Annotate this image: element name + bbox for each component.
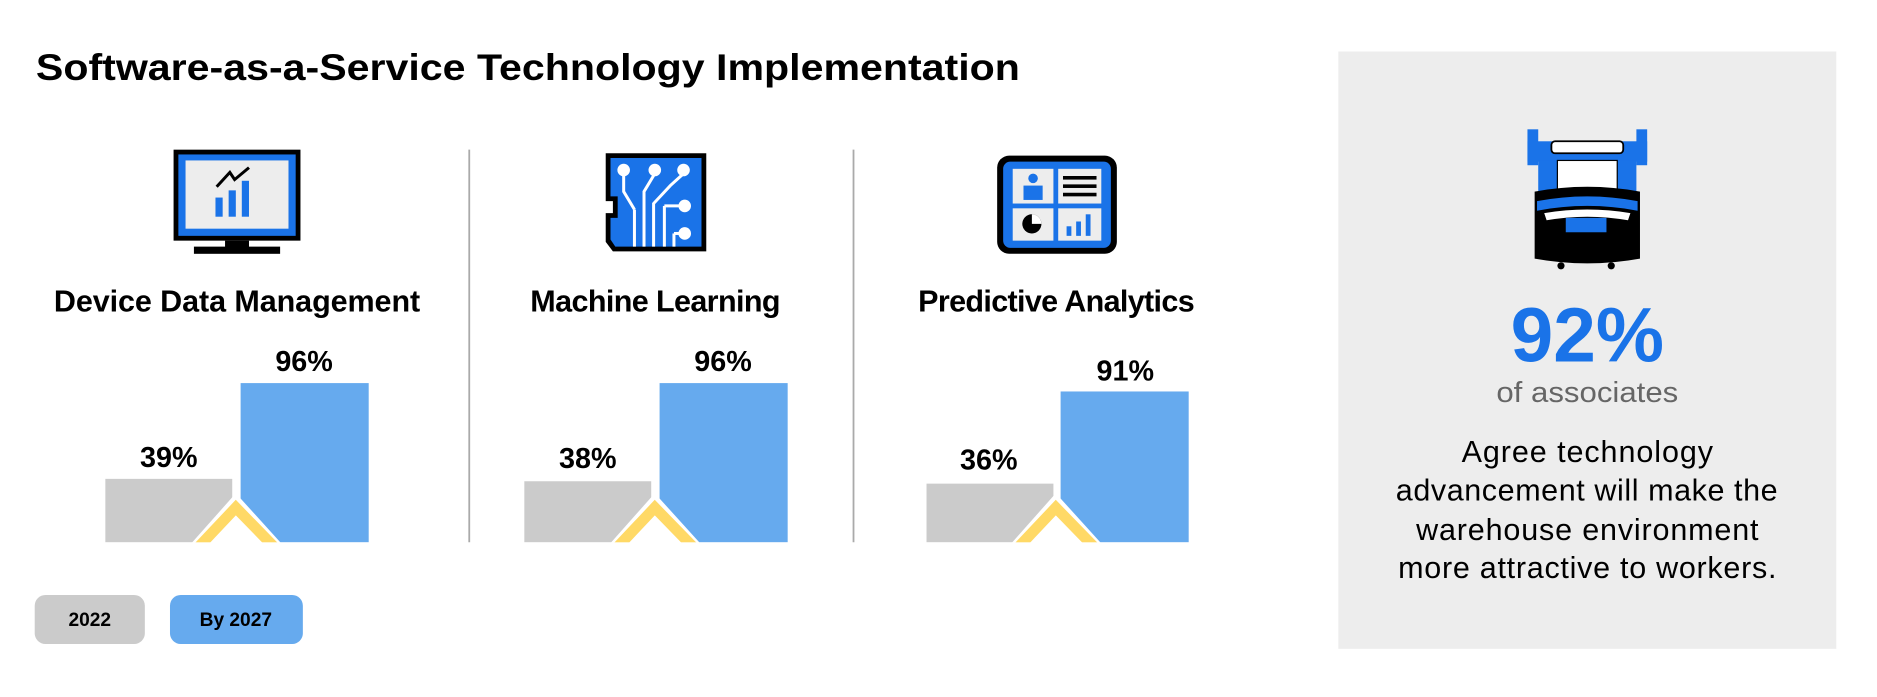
icon: machine learning chip <box>606 153 706 251</box>
panel: associates stat: warehouse environment <box>1415 513 1759 547</box>
labels <box>54 284 1195 318</box>
icon: monitor <box>174 150 300 254</box>
panel: associates stat: of associates <box>1496 377 1678 409</box>
icon: robot <box>1527 129 1647 269</box>
labels: Device Data Management <box>54 284 420 318</box>
icon: dashboard <box>997 156 1117 254</box>
panel: associates stat: Agree technology <box>1462 435 1714 469</box>
labels: Predictive Analytics <box>918 284 1195 318</box>
panel: associates stat: advancement will make the <box>1396 473 1778 507</box>
bar chart: predictive analytics: 91% <box>1097 356 1154 388</box>
legend <box>35 595 303 644</box>
legend: By 2027 <box>200 610 272 631</box>
legend: 2022 <box>68 610 111 631</box>
panel: associates stat: more attractive to workers. <box>1398 551 1776 585</box>
panel: associates stat: 92% <box>1511 294 1664 379</box>
bar chart: machine learning <box>515 346 802 557</box>
bar chart: device data management <box>96 346 383 557</box>
title: Software-as-a-Service Technology Implementation <box>36 46 1020 88</box>
bar chart: machine learning: 96% <box>694 346 752 378</box>
bar chart: device data management: 96% <box>275 346 333 378</box>
bar chart: device data management: 39% <box>140 442 198 474</box>
bar chart: predictive analytics: 36% <box>960 444 1018 476</box>
bar chart: machine learning: 38% <box>559 443 617 475</box>
bar chart: predictive analytics <box>916 356 1203 557</box>
panel: associates stat <box>1338 52 1836 649</box>
labels: Machine Learning <box>530 284 780 318</box>
